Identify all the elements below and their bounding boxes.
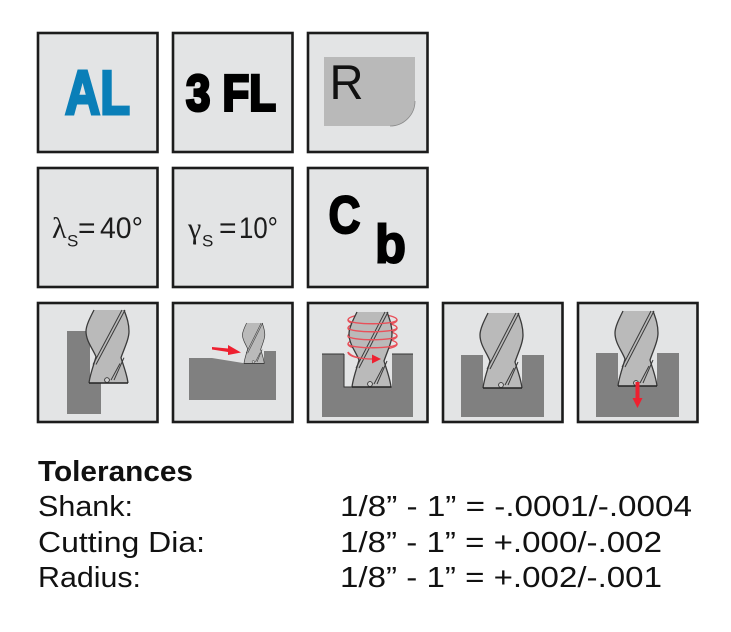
row value: Cutting Dia: 1/8” - 1” = +.000/-.002 (340, 527, 662, 559)
arrow: plunge direction (632, 382, 642, 408)
label: b: b (375, 214, 406, 274)
row label: Cutting Dia: Cutting Dia: (38, 527, 205, 559)
row value: Shank: 1/8” - 1” = -.0001/-.0004 (340, 491, 692, 523)
formula: gamma s = 10 degrees (187, 212, 278, 250)
label: C: C (328, 186, 360, 245)
formula: lambda s = 40 degrees (52, 212, 143, 250)
tile: plunging (578, 303, 698, 422)
tile: 3 flutes (173, 33, 292, 152)
helical path behind tool (348, 314, 397, 359)
formula: gamma s = 10 degrees: 10° (239, 212, 278, 245)
formula: lambda s = 40 degrees: = (78, 212, 96, 245)
icon: end mill (615, 311, 658, 386)
formula: lambda s = 40 degrees: λ (52, 212, 67, 245)
tile: slotting (443, 303, 562, 422)
workpiece (189, 351, 276, 400)
tile: helical interpolation (308, 303, 428, 422)
formula: gamma s = 10 degrees: S (202, 232, 213, 250)
workpiece (461, 355, 544, 417)
label: R: R (330, 56, 364, 110)
formula: lambda s = 40 degrees: S (67, 232, 78, 250)
icon: end mill (349, 312, 392, 387)
icon: radius profile (324, 57, 415, 126)
icon: end mill (86, 310, 129, 383)
row label: Radius: Radius: (38, 562, 141, 594)
tile: corner radius (308, 33, 428, 152)
arrow: feed direction (212, 345, 241, 355)
formula: lambda s = 40 degrees: 40° (100, 212, 143, 245)
label: AL: AL (65, 59, 130, 128)
formula: gamma s = 10 degrees: γ (187, 212, 201, 245)
row value: Radius: 1/8” - 1” = +.002/-.001 (340, 562, 662, 594)
workpiece (67, 331, 101, 414)
tile: side milling (38, 303, 158, 422)
tolerances block (38, 456, 692, 594)
row label: Shank: Shank: (38, 491, 133, 523)
tile: AL material (38, 33, 158, 152)
helical path with arrow (348, 320, 397, 364)
tile: ramping (173, 303, 292, 422)
icon: end mill (242, 323, 265, 364)
tile: coating Cb (308, 168, 428, 287)
heading: Tolerances: Tolerances (38, 456, 193, 488)
workpiece (322, 354, 413, 417)
formula: gamma s = 10 degrees: = (219, 212, 237, 245)
workpiece (596, 353, 679, 417)
icon: end mill (480, 313, 523, 388)
label: 3 FL: 3 FL (186, 64, 276, 122)
tile: rake angle 10 degrees (173, 168, 292, 287)
tile: helix angle 40 degrees (38, 168, 158, 287)
